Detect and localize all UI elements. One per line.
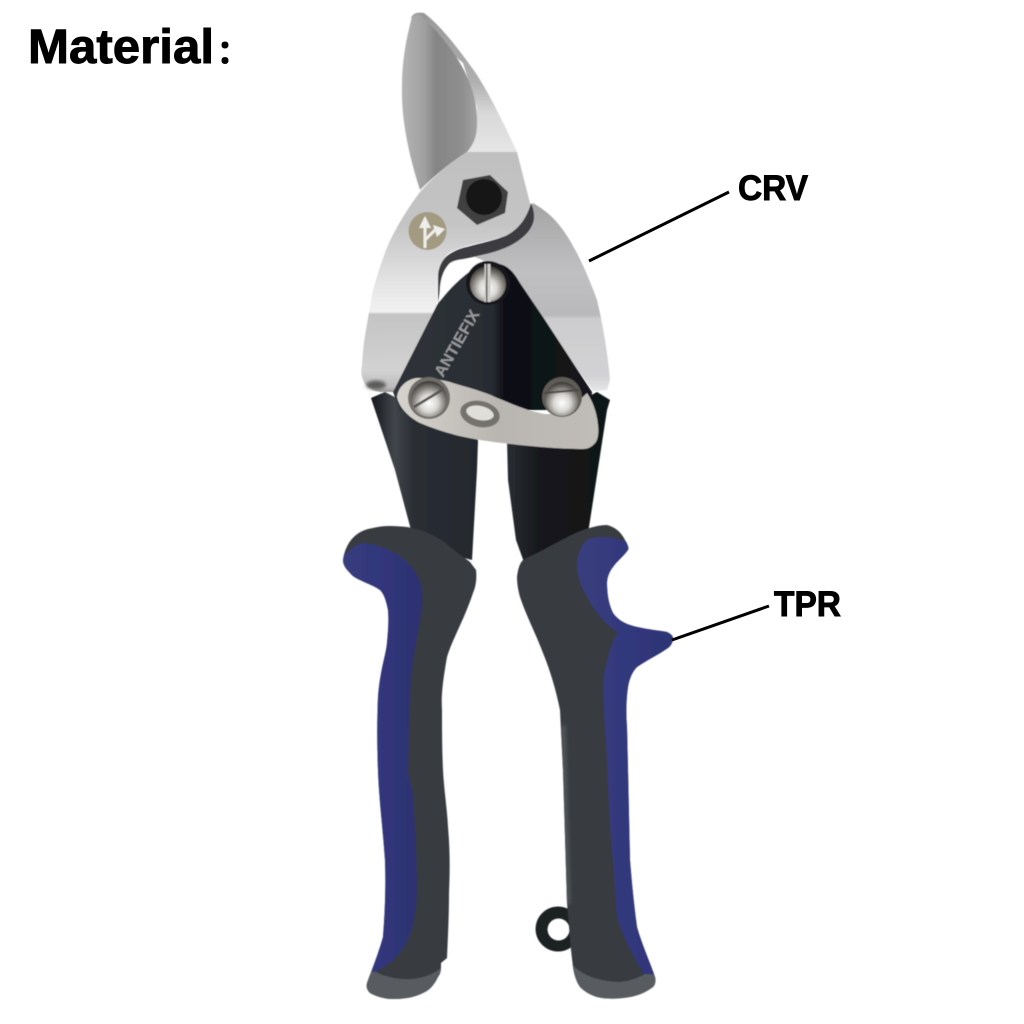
title: ：	[217, 34, 249, 70]
right metal shank	[507, 392, 610, 565]
upper jaw blade	[402, 13, 517, 190]
right silver arm	[470, 203, 610, 391]
left grip	[335, 526, 476, 1005]
left silver arm	[361, 152, 533, 392]
icon: direction arrows badge	[408, 212, 446, 250]
callout: CRV	[589, 169, 809, 261]
left grip blue inlay	[342, 542, 423, 972]
brand text: ANTIEFIX	[432, 307, 484, 380]
tin snips product illustration	[335, 13, 690, 1005]
pivot shadow band	[438, 203, 534, 303]
left grip body	[343, 526, 476, 999]
blade bevel	[411, 13, 517, 152]
title: Material	[28, 21, 214, 74]
opening gap	[440, 259, 484, 302]
callout: TPR: TPR	[774, 585, 841, 624]
right grip edge highlight	[560, 725, 571, 905]
callout: CRV: CRV	[738, 169, 809, 208]
centre rivet	[458, 397, 502, 431]
left grip end cap	[367, 968, 440, 1000]
right grip body	[517, 525, 673, 999]
corner shadow	[366, 380, 386, 390]
left screw	[408, 377, 450, 419]
blade hollow face	[402, 14, 477, 190]
right grip end cap	[573, 966, 656, 999]
right grip blue inlay	[576, 536, 674, 978]
top screw	[466, 261, 510, 305]
right grip	[517, 525, 690, 1005]
icon: hex bolt	[457, 175, 508, 225]
silver rivet plate	[397, 378, 598, 449]
black pivot plate	[393, 263, 592, 410]
callout: TPR	[672, 585, 841, 640]
right screw	[542, 377, 582, 417]
hanging ring	[536, 906, 581, 951]
left metal shank	[371, 392, 478, 560]
